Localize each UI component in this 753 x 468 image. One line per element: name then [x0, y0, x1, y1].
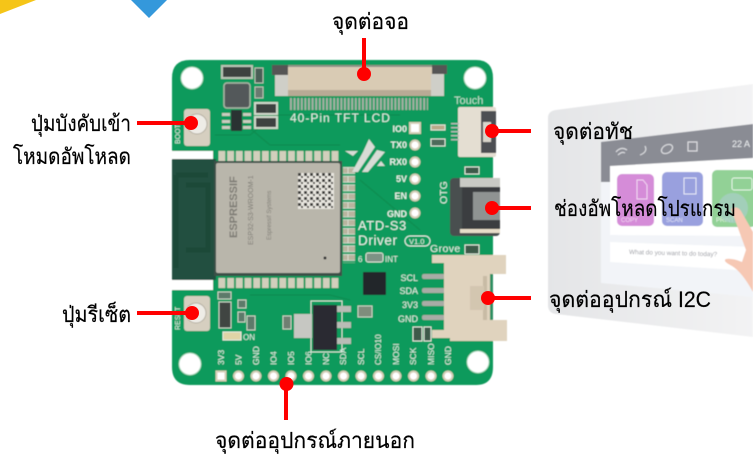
RESET button: RESET	[175, 306, 182, 330]
IO header pads	[387, 123, 420, 219]
power components	[222, 66, 277, 131]
reset area components: ON	[243, 333, 255, 342]
bottom header pads: SCK	[408, 347, 418, 365]
board cutouts around antenna	[170, 151, 213, 159]
callout: boot button	[13, 111, 198, 169]
callout: external devices header	[215, 377, 415, 454]
ESP32 module: ESPRESSIF	[228, 176, 240, 238]
callout: display connector	[332, 9, 409, 81]
screen body	[601, 160, 753, 297]
bottom header pads: IO6	[304, 351, 314, 365]
callout: external devices header: จุดต่ออุปกรณ์ภายนอก	[215, 428, 415, 454]
bottom header pads: SDA	[338, 347, 348, 365]
touch ripple	[718, 193, 748, 223]
INT jumper	[358, 253, 398, 264]
Touch connector: Touch	[454, 95, 483, 107]
bottom header pads: IO5	[286, 351, 296, 365]
callout: reset button	[62, 300, 199, 328]
voltage regulator	[283, 301, 372, 352]
board silk: ATD-S3 Driver	[358, 218, 430, 248]
screen status bar	[601, 124, 753, 182]
callout: display connector: จุดต่อจอ	[332, 9, 409, 35]
tile: copy: COPY	[621, 218, 638, 224]
BOOT button	[175, 109, 210, 146]
callout: I2C connector: จุดต่ออุปกรณ์ I2C	[549, 287, 711, 313]
bottom header pads: MISO	[426, 343, 436, 365]
bottom header pads: NC	[321, 353, 331, 365]
module pads	[218, 151, 340, 161]
ESP32 module: Espressif Systems	[267, 191, 273, 240]
INT jumper: 6	[358, 255, 363, 264]
callout: boot button: ปุ่มบังคับเข้า	[31, 111, 131, 137]
panel: touch screen photo	[548, 84, 753, 337]
callout: touch connector: จุดต่อทัช	[553, 119, 633, 145]
antenna	[172, 159, 216, 280]
date text: 22 A	[732, 139, 750, 149]
decoration: blue triangle	[131, 0, 167, 18]
tile: scan	[662, 172, 703, 226]
callout: reset button: ปุ่มรีเซ็ต	[62, 300, 131, 328]
callout: USB upload port	[485, 196, 736, 221]
USB-C OTG connector: OTG	[438, 181, 450, 204]
Grove connector: 3V3	[402, 300, 418, 310]
bottom header pads	[216, 334, 453, 380]
bottom header pads: SCL	[356, 348, 366, 365]
board silk: ATD-S3 Driver: V1.0	[409, 237, 424, 246]
tile: print: PRINT	[716, 218, 734, 224]
USB-C OTG connector	[438, 178, 500, 236]
ESP32 module: ESP32-S3-WROOM-1	[248, 175, 255, 245]
reset area components	[218, 292, 255, 342]
FPC display connector	[272, 65, 447, 110]
board outline	[172, 60, 493, 385]
BOOT button: BOOT	[175, 123, 182, 144]
panel: PCB board	[170, 60, 507, 385]
screen bezel	[548, 84, 753, 337]
tile: print	[712, 170, 753, 227]
hand	[725, 207, 753, 292]
decoration: yellow corner shape	[0, 0, 36, 14]
tile: copy	[617, 174, 654, 226]
Grove connector: SCL	[400, 273, 418, 283]
INT jumper: INT	[385, 255, 398, 264]
logo	[345, 139, 385, 172]
callout: boot button: โหมดอัพโหลด	[13, 144, 131, 169]
label: 40-Pin TFT LCD: 40-Pin TFT LCD	[290, 111, 391, 125]
mounting holes	[179, 67, 489, 375]
callout: I2C connector	[481, 287, 711, 313]
bottom header pads: 5V	[234, 354, 244, 365]
RESET button	[175, 296, 210, 331]
IO header pads: GND	[387, 209, 408, 219]
QFN chip	[363, 272, 386, 295]
IO header pads: TX0	[390, 140, 407, 150]
tile: scan: SCAN	[666, 218, 683, 224]
bottom header pads: GND	[251, 346, 261, 365]
bottom header pads: IO4	[268, 351, 278, 365]
IO header pads: IO0	[392, 124, 407, 134]
Touch connector	[431, 95, 496, 174]
Grove connector: GND	[398, 314, 418, 324]
ESP32 module	[214, 161, 342, 276]
bottom header pads: MOSI	[391, 343, 401, 365]
IO header pads: RX0	[389, 157, 407, 167]
IO header pads: 5V	[396, 174, 407, 184]
callout: touch connector	[485, 119, 633, 145]
bottom header pads: 3V3	[216, 350, 226, 365]
Grove connector: SDA	[399, 286, 418, 296]
board silk: ATD-S3 Driver: ATD-S3	[358, 218, 407, 233]
board silk: ATD-S3 Driver: Driver	[358, 233, 398, 248]
Grove connector: Grove	[430, 243, 461, 255]
bottom header pads: CS/IO10	[374, 334, 383, 365]
prompt text: What do you want to do today?	[629, 249, 718, 258]
bottom header pads: GND	[443, 346, 453, 365]
traces	[215, 115, 420, 300]
IO header pads: EN	[394, 191, 407, 201]
status icons	[616, 142, 697, 155]
Grove connector	[398, 243, 507, 341]
